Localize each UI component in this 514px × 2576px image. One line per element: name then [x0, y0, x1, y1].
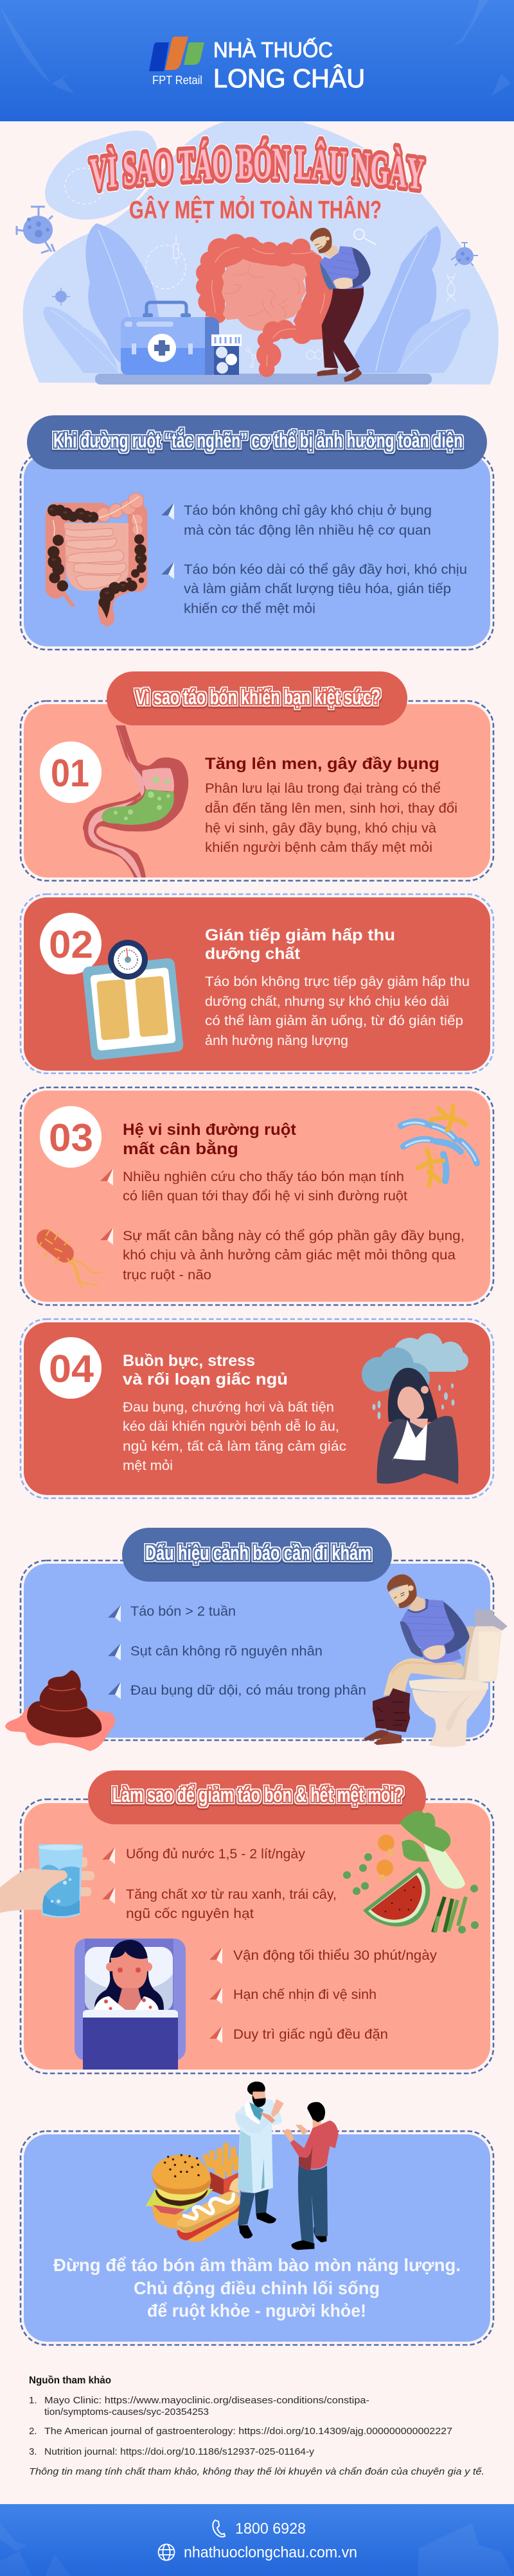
illustration: colon with stool: [48, 493, 146, 625]
bullet text: prolonged constipation: khiến cơ thể mệt mỏi: [184, 601, 315, 616]
panel: reason 01 fermentation: [21, 701, 493, 881]
bullet: [108, 1643, 121, 1661]
body text: [205, 781, 457, 855]
hero illustration panel: [15, 122, 499, 385]
heading pill: why exhausted: [107, 671, 407, 725]
heading pill: [122, 1528, 392, 1582]
icon: phone: [213, 2520, 225, 2537]
ground: [95, 374, 432, 385]
bullet: [100, 1168, 113, 1186]
reference list: 3.: [29, 2446, 37, 2457]
number 02: [40, 913, 102, 974]
logo: FPT Retail mark: [149, 37, 204, 71]
disclaimer: Thông tin mang tính chất tham khảo, không thay thế lời khuyên và chẩn đoán của chuyên gia y tế.: [29, 2466, 484, 2477]
bullet text: Đau bụng dữ dội, có máu trong phân: [130, 1683, 366, 1698]
illustration: doctor: [235, 2082, 284, 2238]
bullet text: prolonged constipation: [184, 562, 467, 616]
body text: hệ vi sinh, gây đầy bụng, khó chịu và: [205, 821, 436, 836]
reference list: tion/symptoms-causes/syc-20354253: [44, 2407, 209, 2417]
bullet text: Sụt cân không rõ nguyên nhân: [130, 1644, 323, 1659]
illustration: man on toilet: [364, 1575, 508, 1747]
body text: Phân lưu lại lâu trong đại tràng có thể: [205, 781, 441, 796]
bullet: [161, 562, 174, 579]
panel: reason 02 absorption: [21, 894, 493, 1073]
body text: kéo dài khiến người bệnh dễ lo âu,: [123, 1419, 339, 1434]
heading: Tăng lên men, gây đầy bụng: [205, 755, 439, 773]
bullet: [209, 2026, 222, 2043]
bullet text: [126, 1887, 337, 1921]
first-aid kit: [121, 302, 219, 375]
icon: DNA: [447, 273, 455, 302]
number 04: [40, 1337, 102, 1399]
number 03: [40, 1106, 102, 1168]
pill bottle: [211, 334, 242, 375]
bullet text: studies: [123, 1170, 407, 1204]
illustration: bacillus: [33, 1226, 103, 1289]
illustration: vegetables and watermelon: [343, 1811, 479, 1933]
title line 2: GÂY MỆT MỎI TOÀN THÂN?: [129, 196, 382, 224]
leaves: [44, 223, 470, 374]
illustration: sleeping woman in bed: [75, 1939, 186, 2070]
reference list: Nutrition journal: https://doi.org/10.1186/s12937-025-01164-y: [44, 2446, 315, 2457]
website: nhathuoclongchau.com.vn: [184, 2544, 357, 2561]
icon: syringe: [172, 235, 180, 266]
body text: Táo bón không trực tiếp gây giảm hấp thu: [205, 974, 470, 989]
number 04: 04: [49, 1347, 94, 1390]
header band: [0, 0, 514, 121]
heading: Hệ vi sinh đường ruột: [123, 1121, 297, 1139]
logo text: Nhà thuốc: NHÀ THUỐC: [213, 37, 333, 62]
illustration: stomach: [83, 725, 188, 877]
reference list: Mayo Clinic: https://www.mayoclinic.org/diseases-conditions/constipa-: [44, 2395, 369, 2406]
bullet text: Hạn chế nhịn đi vệ sinh: [233, 1987, 377, 2002]
bullet text: studies: Nhiều nghiên cứu cho thấy táo bón mạn tính: [123, 1170, 404, 1184]
reference list: 2.: [29, 2426, 37, 2437]
heading: Buồn bực, stress: [123, 1352, 255, 1370]
illustration: fast food: [146, 2143, 241, 2242]
bullet text: Vận động tối thiểu 30 phút/ngày: [233, 1948, 438, 1963]
icon: large virus: [17, 207, 55, 253]
bullet text: imbalance: Sự mất cân bằng này có thể góp phần gây đầy bụng,: [123, 1229, 465, 1243]
bullet text: imbalance: [123, 1229, 465, 1283]
bullet: [209, 1947, 222, 1964]
references heading: Nguồn tham khảo: [29, 2375, 111, 2386]
body text: dẫn đến tăng lên men, sinh hơi, thay đổi: [205, 801, 457, 816]
bullet text: Táo bón > 2 tuần: [130, 1604, 236, 1619]
body text: có thể làm giảm ăn uống, từ đó gián tiếp: [205, 1014, 463, 1028]
illustration: scale: [82, 940, 184, 1060]
heading: mất cân bằng: [123, 1139, 238, 1158]
heading pill: why exhausted: Vì sao táo bón khiến bạn kiệt sức?: [136, 686, 380, 709]
intestine illustration: [196, 234, 334, 377]
heading: và rối loạn giấc ngủ: [123, 1370, 288, 1388]
man holding stomach: [310, 228, 371, 382]
illustration: bacteria cluster: [401, 1105, 477, 1186]
panel: warning signs: [5, 1528, 508, 1751]
bullet: [102, 1887, 115, 1904]
footer band: [0, 2504, 514, 2576]
panel: how to reduce constipation: [0, 1770, 493, 2073]
panel: reason 04 stress and sleep: [21, 1319, 493, 1498]
closing message text: Đừng để táo bón âm thầm bào mòn năng lượng.: [53, 2255, 461, 2275]
closing message text: [53, 2255, 461, 2321]
icon: small left virus: [52, 288, 70, 306]
body text: ngủ kém, tất cả làm tăng cảm giác: [123, 1439, 346, 1454]
body text: mệt mỏi: [123, 1458, 173, 1473]
bullet: [209, 1987, 222, 2004]
closing message text: để ruột khỏe - người khỏe!: [147, 2301, 366, 2321]
reference list: 1.: [29, 2395, 37, 2406]
number 01: [40, 741, 102, 803]
illustration: hand with water glass: [0, 1844, 94, 1918]
logo text: Long Châu: LONG CHÂU: [213, 64, 365, 93]
bullet text: prolonged constipation: và làm giảm chất lượng tiêu hóa, gián tiếp: [184, 582, 451, 596]
number 01: 01: [51, 752, 89, 795]
illustration: patient: [283, 2102, 339, 2250]
references: [29, 2375, 484, 2477]
bullet text: imbalance: khó chịu và ảnh hưởng cảm giác mệt mỏi thông qua: [123, 1248, 456, 1263]
panel: closing message: [21, 2082, 493, 2345]
number 02: 02: [49, 923, 93, 966]
body text: dưỡng chất, nhưng sự khó chịu kéo dài: [205, 994, 449, 1009]
icon: magnifier: [354, 229, 376, 245]
bullet text: ngũ cốc nguyên hạt: [126, 1906, 254, 1921]
bullet: [100, 1227, 113, 1245]
body text: Đau bụng, chướng hơi và bất tiện: [123, 1400, 334, 1415]
body text: khiến người bệnh cảm thấy mệt mỏi: [205, 840, 432, 855]
body text: [123, 1400, 346, 1473]
panel: reason 03 microbiome: [21, 1087, 493, 1305]
icon: globe: [158, 2545, 175, 2560]
panel: intestinal blockage overview: [21, 415, 493, 650]
heading pill: Dấu hiệu cảnh báo cần đi khám: [145, 1541, 371, 1564]
illustration: sad woman under rain cloud: [362, 1333, 468, 1484]
heading: dưỡng chất: [205, 945, 301, 963]
bullet: [161, 503, 174, 520]
body text: [205, 974, 470, 1048]
illustration: stool: [5, 1670, 115, 1751]
hero background dome: [23, 122, 499, 385]
reference list: [29, 2395, 452, 2457]
title: [87, 134, 427, 224]
bullet: [108, 1682, 121, 1699]
bullet text: not only belly: Táo bón không chỉ gây khó chịu ở bụng: [184, 503, 432, 518]
bullet text: studies: có liên quan tới thay đổi hệ vi sinh đường ruột: [123, 1189, 407, 1204]
bullet text: not only belly: mà còn tác động lên nhiều hệ cơ quan: [184, 523, 431, 538]
heading: [123, 1121, 297, 1158]
bullet: [108, 1605, 121, 1622]
bullet text: Uống đủ nước 1,5 - 2 lít/ngày: [126, 1847, 306, 1862]
body text: ảnh hưởng năng lượng: [205, 1033, 348, 1048]
icon: molecules: [246, 348, 323, 367]
bullet text: prolonged constipation: Táo bón kéo dài có thể gây đầy hơi, khó chịu: [184, 562, 467, 577]
bullet text: Tăng chất xơ từ rau xanh, trái cây,: [126, 1887, 337, 1902]
bullet text: not only belly: [184, 503, 432, 538]
heading pill: [88, 1770, 426, 1824]
heading: [123, 1352, 288, 1388]
bullet text: imbalance: trục ruột - não: [123, 1268, 211, 1283]
heading pill: [27, 415, 487, 469]
phone number: 1800 6928: [235, 2520, 306, 2537]
bullet: [102, 1847, 115, 1864]
heading: Gián tiếp giảm hấp thu: [205, 926, 395, 944]
title line 1: VÌ SAO TÁO BÓN LÂU NGÀY: [87, 134, 427, 194]
reference list: The American journal of gastroenterology: https://doi.org/10.14309/ajg.000000000002227: [44, 2426, 452, 2437]
logo text: FPT Retail: FPT Retail: [152, 74, 202, 87]
closing message text: Chủ động điều chỉnh lối sống: [134, 2278, 380, 2298]
number 03: 03: [49, 1116, 93, 1159]
bullet text: Duy trì giấc ngủ đều đặn: [233, 2027, 388, 2042]
icon: right virus: [451, 242, 478, 266]
heading pill: Làm sao để giảm táo bón & hết mệt mỏi?: [112, 1783, 403, 1806]
heading: [205, 926, 395, 963]
